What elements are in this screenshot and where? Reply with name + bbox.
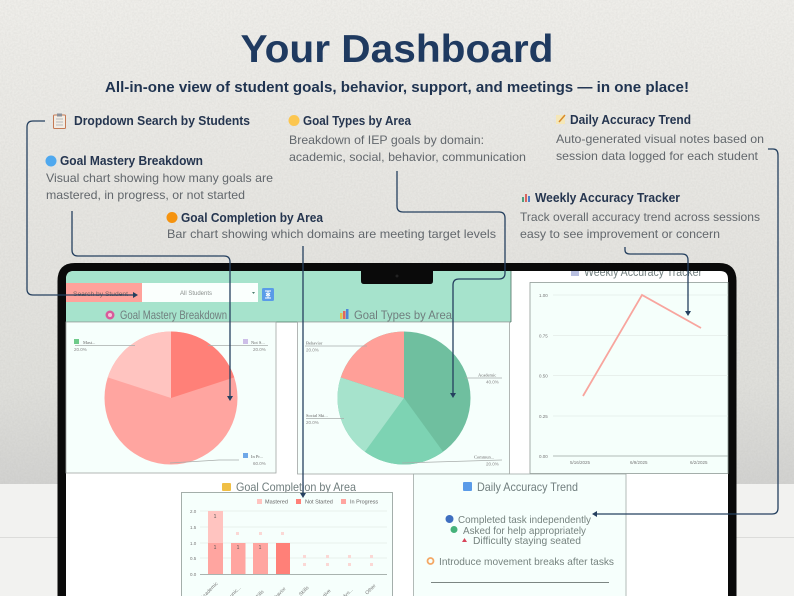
callout: goal types by area — [288, 114, 526, 164]
pie labels: 20.0% — [253, 347, 266, 352]
icon: blue dot — [46, 156, 56, 166]
callout: weekly accuracy tracker: Weekly Accuracy Tracker — [535, 191, 680, 205]
arrow: goal mastery — [72, 211, 233, 401]
pie labels: Academic — [478, 372, 496, 378]
line chart: 0.75 — [539, 334, 548, 338]
callout: weekly accuracy tracker: Track overall accuracy trend across sessions — [520, 210, 760, 224]
callout: goal completion by area — [166, 211, 496, 241]
bar legend: Mastered — [265, 500, 288, 506]
arrow: goal types — [397, 171, 505, 398]
pie labels: 60.0% — [253, 461, 266, 466]
bar chart: 0.5 — [190, 556, 197, 561]
pie labels: 40.0% — [486, 380, 499, 384]
pie labels: Behavior — [306, 340, 323, 346]
bar chart — [190, 509, 387, 596]
line chart: 6/9/2025 — [630, 460, 648, 465]
behavior notes: Difficulty staying seated — [473, 535, 581, 547]
panel: goal completion by area — [182, 480, 392, 596]
panel heading: Goal Types by Area — [354, 308, 452, 322]
bar legend — [257, 499, 378, 506]
panel: goal mastery breakdown — [66, 308, 276, 473]
callout: goal types by area: Goal Types by Area — [303, 114, 412, 128]
pie labels: Not S... — [251, 340, 265, 345]
bar chart: 0.0 — [190, 572, 197, 577]
pie labels: 20.0% — [306, 420, 319, 425]
pie labels: Social Ski... — [306, 413, 328, 418]
pie labels — [74, 339, 268, 466]
callout: weekly accuracy tracker: easy to see improvement or concern — [520, 227, 720, 241]
behavior notes — [428, 514, 614, 568]
panel heading: Goal Mastery Breakdown — [120, 308, 227, 322]
arrow: dropdown search — [27, 121, 138, 298]
callout: goal mastery breakdown — [46, 154, 273, 202]
icon: orange dot — [166, 212, 178, 223]
pie labels: Commun... — [474, 454, 494, 460]
pie labels: In Pr... — [251, 454, 263, 459]
callout: daily accuracy trend — [556, 113, 764, 163]
bar chart: 2.0 — [190, 509, 197, 514]
dropdown search control: All Students — [180, 291, 212, 297]
line chart — [539, 293, 728, 465]
bar legend: Not Started — [305, 500, 333, 506]
callout: goal types by area: Breakdown of IEP goals by domain: — [289, 133, 484, 147]
panel heading — [571, 271, 700, 278]
behavior notes: Asked for help appropriately — [463, 525, 587, 537]
pie chart — [338, 332, 470, 465]
line chart: 5/16/2025 — [570, 460, 591, 465]
callout: daily accuracy trend: session data logged for each student — [556, 149, 759, 163]
arrow: daily trend — [592, 149, 778, 517]
icon: yellow dot — [288, 115, 300, 126]
behavior notes: Completed task independently — [458, 514, 592, 526]
camera notch — [361, 271, 433, 284]
dropdown search control: Search by Student — [73, 291, 128, 298]
bar chart: 1 — [214, 545, 217, 551]
bar chart: 1 — [214, 514, 217, 520]
line chart: 6/2/2025 — [690, 460, 708, 465]
panel heading: Goal Completion by Area — [236, 480, 356, 494]
icon: small bar chart — [522, 194, 530, 202]
callout: weekly accuracy tracker — [520, 191, 760, 241]
bar chart: 1 — [259, 545, 262, 551]
line chart: 0.50 — [539, 374, 548, 378]
bar chart: 1 — [237, 545, 240, 551]
panel: goal types by area — [298, 308, 510, 474]
pie labels: 20.0% — [306, 348, 319, 352]
behavior notes: Introduce movement breaks after tasks — [439, 556, 614, 568]
pie labels: Mast... — [83, 340, 95, 345]
subtitle: All-in-one view of student goals, behavior, support, and meetings — in one place! — [105, 80, 689, 96]
icon: clipboard — [54, 114, 66, 128]
laptop bezel — [58, 263, 736, 596]
icon: memo — [556, 115, 565, 124]
panel heading: Weekly Accuracy Tracker — [584, 265, 702, 279]
bar chart: 1.0 — [190, 541, 197, 546]
callout: goal mastery breakdown: Visual chart showing how many goals are — [46, 171, 273, 185]
line chart: 0.00 — [539, 454, 548, 459]
pie chart — [104, 332, 238, 464]
callout: goal types by area: academic, social, behavior, communication — [289, 150, 526, 164]
callout: dropdown search by students: Dropdown Search by Students — [74, 114, 250, 128]
callout: daily accuracy trend: Daily Accuracy Trend — [570, 113, 691, 127]
title: Your Dashboard — [240, 28, 554, 71]
callout: goal mastery breakdown: mastered, in progress, or not started — [46, 188, 245, 202]
panel: daily accuracy trend — [414, 474, 626, 596]
line chart: 0.25 — [539, 414, 548, 419]
pie labels: 20.0% — [486, 462, 499, 466]
pie labels: 20.0% — [74, 347, 87, 352]
callout: goal completion by area: Goal Completion by Area — [181, 211, 324, 225]
dashboard header band — [66, 271, 511, 322]
bar chart: 1.5 — [190, 525, 197, 530]
callout: daily accuracy trend: Auto-generated visual notes based on — [556, 132, 764, 146]
callout: goal mastery breakdown: Goal Mastery Breakdown — [60, 154, 203, 168]
panel: weekly accuracy tracker — [530, 265, 728, 474]
bar chart: Other — [364, 583, 378, 596]
arrow: weekly tracker — [625, 247, 691, 316]
laptop mockup — [58, 263, 736, 596]
callout: goal completion by area: Bar chart showing which domains are meeting target levels — [167, 227, 496, 241]
pie labels — [305, 340, 502, 466]
line chart: 1.00 — [539, 293, 548, 298]
bar legend: In Progress — [350, 500, 378, 506]
panel heading: Daily Accuracy Trend — [477, 480, 578, 494]
dropdown search control — [66, 283, 274, 302]
arrow: goal completion — [300, 246, 306, 498]
screen — [66, 271, 728, 596]
